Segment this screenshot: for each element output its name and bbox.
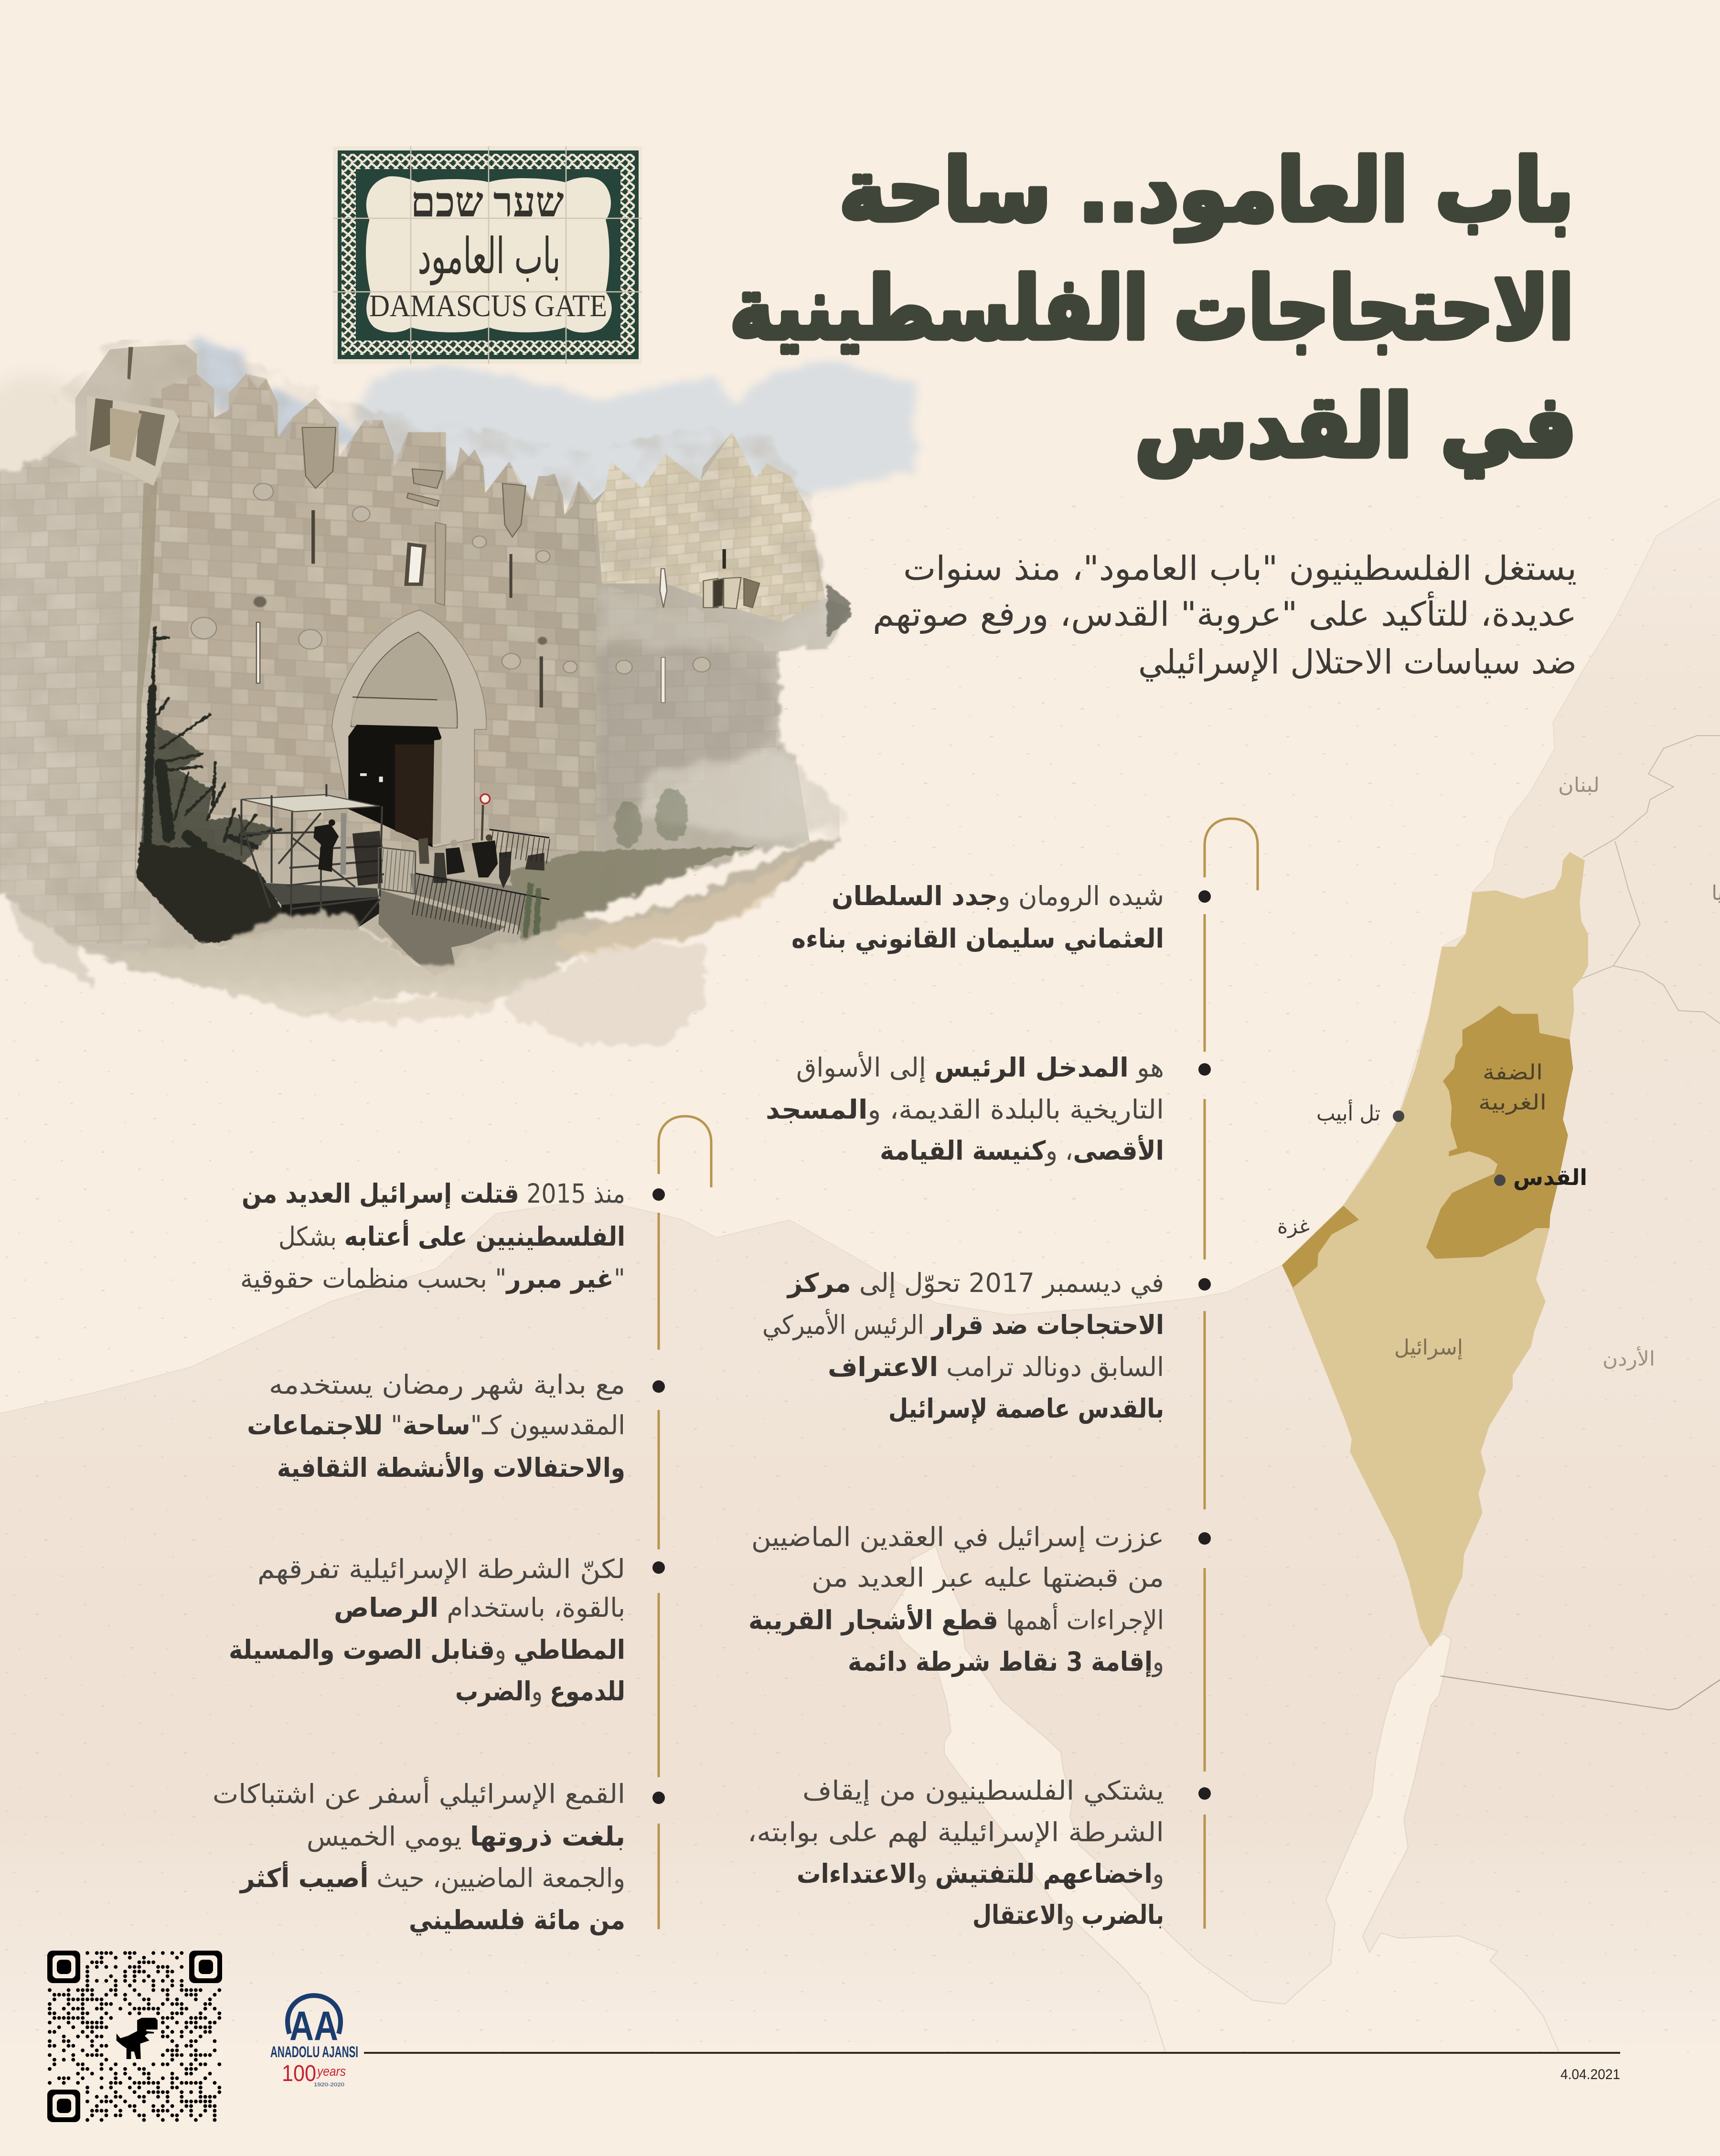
map: regional base map [0,497,1720,2156]
item 4 [748,1522,1164,1677]
vegetation on wall [139,628,281,875]
left tower pilaster [134,481,158,915]
logo arc [288,1996,341,2034]
English text: DAMASCUS GATE [369,288,607,323]
item 5: واخضاعهم للتفتيش والاعتداءات [797,1858,1164,1889]
territory: Israel [1282,852,1588,1647]
label: Jordan: الأردن [1602,1346,1655,1370]
item 4 [213,1777,625,1936]
photo foreground: gate entrance and scaffold [137,610,549,976]
item 2: والاحتفالات والأنشطة الثقافية [277,1452,625,1484]
centenary mark: 100 [282,2061,316,2086]
Anadolu Agency logo [270,1996,358,2088]
item 4: وإقامة 3 نقاط شرطة دائمة [848,1646,1164,1677]
map: Israel and Palestine [1282,852,1588,1647]
street sign: Damascus Gate tile [333,146,642,364]
territory: West Bank [1426,1005,1573,1259]
label: West Bank [1478,1060,1547,1115]
item 3 [229,1554,625,1707]
gate column [435,523,446,605]
label: Israel: إسرائيل [1394,1335,1463,1360]
label: Tel Aviv: تل أبيب [1316,1099,1380,1126]
item 4: عززت إسرائيل في العقدين الماضيين [751,1522,1164,1553]
left tower stones [0,457,150,944]
railings [378,830,549,915]
item 1: العثماني سليمان القانوني بناءه [791,923,1164,954]
sky wash [194,340,916,505]
tile frame [333,146,642,364]
title [730,141,1577,477]
scaffold [239,784,384,928]
label: Gaza: غزة [1277,1215,1310,1238]
map labels [1277,773,1720,1370]
item 1 [791,881,1164,954]
gulfs and Red Sea [888,1546,1559,2052]
item 2: مع بداية شهر رمضان يستخدمه [269,1369,625,1400]
footer rule [364,2052,1620,2054]
right tower base tone [596,432,825,622]
bottom right fade [637,749,857,842]
right timeline [748,819,1258,1931]
wall window [406,544,424,584]
QR finder: top left [47,1951,80,1983]
centenary dates: 1920-2020 [314,2082,344,2088]
item 2 [766,1051,1164,1166]
arrow slits [256,510,726,707]
QR code [47,1951,222,2122]
item 3: لكنّ الشرطة الإسرائيلية تفرقهم [257,1554,625,1585]
item 2: المقدسيون كـ"ساحة" للاجتماعات [247,1410,625,1441]
intro paragraph: يستغل الفلسطينيون "باب العامود"، منذ سنوات [903,549,1577,588]
intro paragraph: ضد سياسات الاحتلال الإسرائيلي [1138,642,1577,682]
centenary years word: years [316,2064,346,2079]
title: في القدس [1135,377,1577,477]
lower right tower stones [596,583,781,827]
item 4: الإجراءات أهمها قطع الأشجار القريبة [748,1603,1164,1636]
left timeline [213,1116,711,1936]
QR data modules [50,1953,219,2120]
item 3: للدموع والضرب [455,1676,625,1707]
item 3: بالقوة، باستخدام الرصاص [334,1592,625,1623]
scaffold platform [263,883,378,905]
timeline dots [652,1188,665,1804]
territory: Gaza [1282,1206,1359,1288]
right tower corbels [704,577,759,608]
item 1: شيده الرومان وجدد السلطان [832,881,1164,912]
agency name: ANADOLU AJANSI [270,2043,358,2060]
QR finder: top right [189,1951,222,1983]
item 5: بالضرب والاعتقال [972,1900,1164,1931]
pale wash over tower [602,588,724,651]
item 1: منذ 2015 قتلت إسرائيل العديد من [242,1178,625,1209]
timeline dots [1198,890,1211,1800]
intro paragraph [873,549,1577,682]
wall corbels [302,427,525,537]
main wall body [0,344,851,993]
wall round stones [191,483,710,674]
item 5: يشتكي الفلسطينيون من إيقاف [802,1775,1164,1806]
item 3: الاحتجاجات ضد قرار الرئيس الأميركي [762,1309,1164,1341]
people [313,819,545,888]
dark ground [137,842,358,945]
item 3: المطاطي وقنابل الصوت والمسيلة [229,1634,625,1665]
braided border [342,154,635,355]
tower shadow wash [596,647,776,822]
item 4: والجمعة الماضيين، حيث أصيب أكثر [239,1861,625,1894]
item 2 [247,1369,625,1484]
item 2: هو المدخل الرئيس إلى الأسواق [796,1051,1164,1083]
border: Jordan and Saudi Arabia [1441,1676,1720,1710]
item 3: في ديسمبر 2017 تحوّل إلى مركز [786,1268,1164,1299]
stone mottling [0,340,839,949]
item 5: الشرطة الإسرائيلية لهم على بوابته، [748,1817,1164,1848]
right bush [510,788,759,944]
item 1: "غير مبرر" بحسب منظمات حقوقية [240,1263,625,1294]
label: West Bank: الضفة [1483,1060,1543,1085]
land: surrounding countries [0,497,1720,2156]
item 2: التاريخية بالبلدة القديمة، والمسجد [766,1094,1164,1125]
gate arch and door [332,610,486,847]
left halo wash [0,374,98,501]
small center plant [525,883,539,938]
item 4: القمع الإسرائيلي أسفر عن اشتباكات [213,1777,625,1810]
item 4: من قبضتها عليه عبر العديد من [812,1562,1164,1593]
item 1: الفلسطينيين على أعتابه بشكل [278,1219,625,1252]
label: Lebanon: لبنان [1558,773,1600,797]
country borders [1581,736,1720,1024]
tree behind right tower [827,583,851,637]
main wall stones [150,374,596,851]
watercolor washes under gate [6,839,839,1046]
Hebrew text: שער שכם [411,180,564,226]
ramp wall below gate [378,890,506,976]
cream cartouche [366,176,612,332]
item 2: الأقصى، وكنيسة القيامة [880,1135,1164,1166]
item 5 [748,1775,1164,1931]
QR finder: bottom left [47,2090,80,2122]
title: الاحتجاجات الفلسطينية [730,259,1574,359]
QR center dinosaur icon [117,2018,158,2059]
publication date: 4.04.2021 [1560,2067,1620,2082]
item 3 [762,1268,1164,1424]
item 3: بالقدس عاصمة لإسرائيل [888,1393,1164,1424]
paper speckle texture [0,497,1720,2054]
right tower stones [596,432,825,622]
item 4: من مائة فلسطيني [409,1905,625,1936]
item 4: بلغت ذروتها يومي الخميس [307,1821,625,1852]
label: West Bank: الغربية [1478,1090,1547,1115]
walkway [410,874,523,927]
item 1 [240,1178,625,1294]
title: باب العامود.. ساحة [839,141,1574,241]
timeline arch and rail [659,1116,711,1929]
timeline arch and rail [1205,819,1258,1929]
space beneath platform [281,897,380,929]
photo: Damascus Gate watercolor [0,340,916,993]
left tower machicolation [87,347,180,486]
Arabic text: باب العامود [417,227,561,286]
label: Jerusalem: القدس [1513,1164,1587,1190]
item 3: السابق دونالد ترامب الاعتراف [828,1352,1164,1383]
green field [338,150,639,359]
logo letters: AA [289,2003,338,2049]
road sign [481,794,490,841]
gate walls [0,340,857,993]
intro paragraph: عديدة، للتأكيد على "عروبة" القدس، ورفع صوتهم [873,591,1577,634]
tile joints [333,146,642,364]
